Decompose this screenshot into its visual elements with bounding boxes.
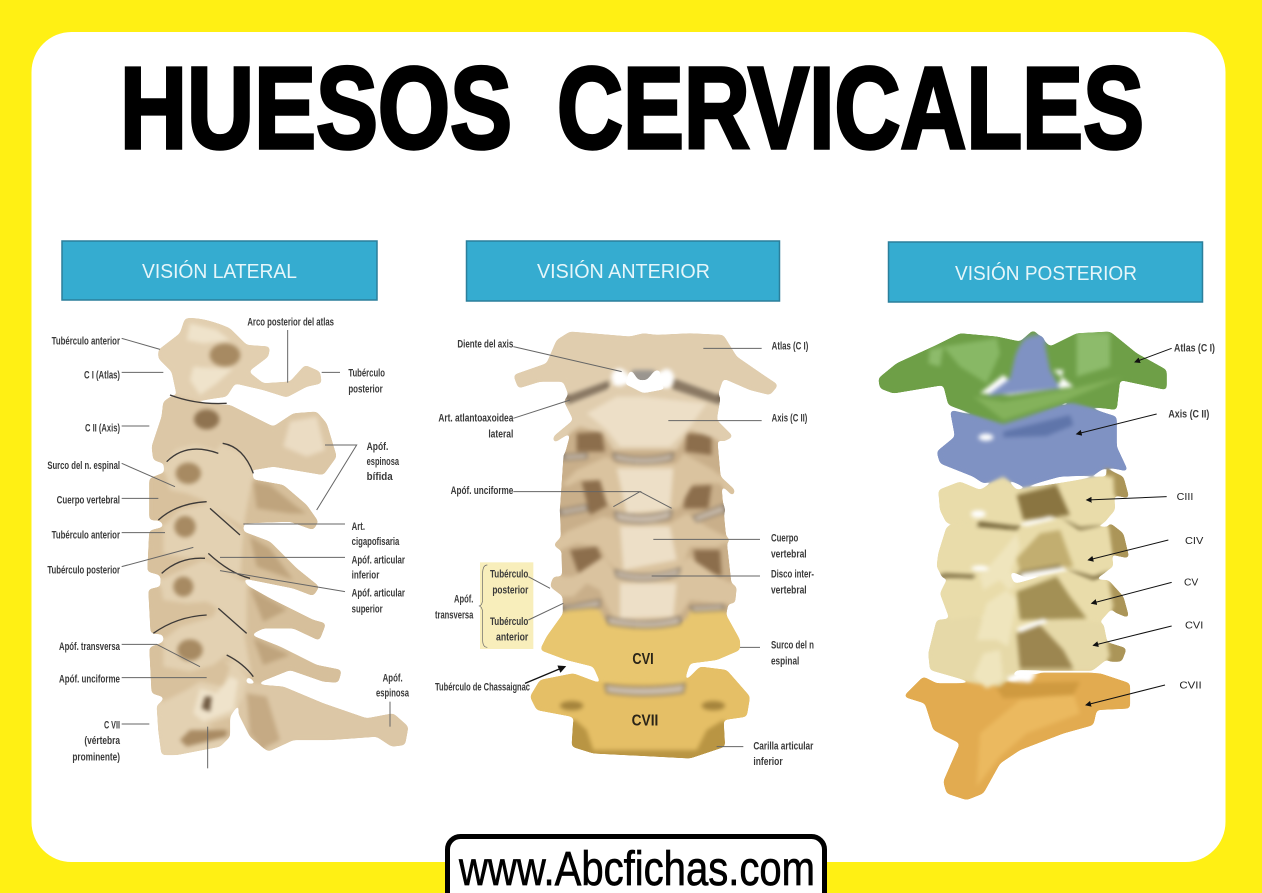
CV bbox=[940, 572, 1113, 630]
anterior view labels: Tubérculo de Chassaignac bbox=[435, 682, 530, 694]
posterior view labels: Atlas (C I) bbox=[1174, 343, 1215, 355]
posterior view labels: CVII bbox=[1179, 680, 1202, 691]
joint lines bbox=[153, 395, 253, 677]
anterior view labels: Tubérculo bbox=[490, 568, 529, 580]
anterior view labels: Apóf. unciforme bbox=[451, 485, 513, 497]
heading: visión anterior: VISIÓN ANTERIOR bbox=[537, 260, 710, 283]
right spurs bbox=[1105, 468, 1129, 662]
lateral view labels: Apóf. transversa bbox=[59, 641, 121, 653]
intervertebral discs bbox=[560, 380, 725, 695]
posterior column base bbox=[560, 423, 732, 620]
C I bbox=[158, 318, 322, 400]
heading: visión posterior: VISIÓN POSTERIOR bbox=[955, 262, 1137, 285]
foramina bbox=[611, 369, 674, 388]
lateral view labels: Apóf. unciforme bbox=[59, 674, 120, 686]
anterior view labels: Tubérculo bbox=[490, 616, 529, 628]
lateral view labels: Tubérculo anterior bbox=[52, 529, 121, 541]
anterior view labels bbox=[435, 339, 814, 768]
lateral view labels: prominente) bbox=[72, 752, 120, 764]
lateral view labels: Arco posterior del atlas bbox=[247, 317, 334, 329]
notches bbox=[971, 510, 1067, 683]
posterior view labels: CV bbox=[1184, 578, 1199, 589]
anterior view labels: vertebral bbox=[771, 584, 807, 596]
column base bbox=[147, 443, 253, 755]
anterior view labels: Art. atlantoaxoidea bbox=[438, 413, 514, 425]
CIV bbox=[937, 518, 1113, 578]
anterior view labels: Apóf. bbox=[454, 593, 473, 605]
yellow vertebrae CVI and CVII bbox=[530, 603, 750, 758]
atlas (green) bbox=[878, 330, 1167, 424]
lateral view labels: Apóf. bbox=[367, 441, 388, 453]
posterior view labels bbox=[1168, 343, 1215, 691]
anterior view labels: Carilla articular bbox=[753, 740, 814, 752]
lateral view labels: C I (Atlas) bbox=[84, 369, 120, 381]
panel: posterior view diagram bbox=[878, 330, 1215, 800]
lateral view labels: Tubérculo anterior bbox=[52, 335, 121, 347]
CVI bbox=[928, 617, 1110, 687]
anterior view labels: Disco inter- bbox=[771, 569, 814, 581]
anterior view labels: inferior bbox=[753, 756, 783, 768]
lateral view labels: posterior bbox=[348, 383, 383, 395]
leader lines bbox=[479, 347, 762, 747]
vertebra label CVI: CVI bbox=[632, 651, 654, 668]
spinous processes bbox=[973, 533, 1020, 688]
heading: visión lateral bbox=[62, 241, 377, 300]
anterior view labels: Diente del axis bbox=[457, 339, 513, 351]
anterior view labels: espinal bbox=[771, 655, 799, 667]
illustration: anterior cervical spine bbox=[513, 332, 778, 758]
heading: visión anterior bbox=[466, 241, 780, 301]
heading: visión posterior bbox=[888, 242, 1202, 302]
title bbox=[120, 43, 1144, 173]
posterior view labels: Axis (C II) bbox=[1168, 408, 1210, 420]
foramina bbox=[173, 343, 240, 712]
posterior view labels: CVI bbox=[1185, 620, 1203, 631]
leader lines bbox=[122, 330, 390, 768]
anterior view labels: vertebral bbox=[771, 548, 807, 560]
axis (blue) bbox=[937, 403, 1128, 487]
lateral view labels: Apóf. bbox=[383, 673, 403, 685]
vertebra label CVII: CVII bbox=[632, 712, 658, 729]
lateral view labels: Tubérculo posterior bbox=[47, 564, 121, 576]
lateral view labels: Apóf. articular bbox=[352, 588, 406, 600]
lateral view labels: inferior bbox=[352, 569, 380, 581]
anterior view labels: posterior bbox=[492, 584, 529, 596]
spinous processes bbox=[237, 478, 408, 752]
lateral view labels: Art. bbox=[352, 521, 365, 533]
C VII bbox=[157, 660, 247, 755]
arrow: Chassaignac tubercle bbox=[525, 667, 565, 683]
anterior view labels: lateral bbox=[488, 429, 513, 441]
lateral view labels: (vértebra bbox=[84, 735, 121, 747]
illustration: lateral cervical spine bbox=[147, 318, 408, 755]
CVII bbox=[903, 673, 1130, 800]
C II bbox=[152, 395, 337, 475]
lateral pieces bbox=[160, 443, 253, 677]
panel: anterior view diagram bbox=[435, 332, 814, 768]
lateral view labels: espinosa bbox=[376, 688, 410, 700]
lateral view labels: superior bbox=[352, 603, 383, 615]
anterior view labels: transversa bbox=[435, 609, 474, 621]
anterior view labels: Cuerpo bbox=[771, 533, 799, 545]
anterior view labels: Surco del n bbox=[771, 639, 814, 651]
lateral view labels: Tubérculo bbox=[348, 368, 385, 380]
posterior view labels: CIV bbox=[1185, 536, 1204, 547]
lateral view labels bbox=[47, 317, 410, 764]
lateral view labels: C VII bbox=[104, 719, 120, 731]
CIII bbox=[938, 477, 1115, 530]
dens bbox=[987, 335, 1060, 396]
anterior view labels: Axis (C II) bbox=[772, 413, 808, 425]
lateral view labels: Surco del n. espinal bbox=[47, 460, 120, 472]
title: HUESOS bbox=[120, 43, 512, 173]
arrows bbox=[1077, 348, 1172, 705]
lateral view labels: C II (Axis) bbox=[85, 423, 120, 435]
heading: visión lateral: VISIÓN LATERAL bbox=[142, 260, 297, 283]
posterior view labels: CIII bbox=[1177, 492, 1193, 503]
lateral view labels: cigapofisaria bbox=[352, 536, 400, 548]
panel: lateral view diagram bbox=[47, 317, 410, 768]
lateral view labels: Apóf. articular bbox=[352, 554, 406, 566]
lateral view labels: bífida bbox=[367, 471, 393, 483]
anterior view labels: anterior bbox=[496, 632, 529, 644]
illustration: posterior cervical spine bbox=[878, 330, 1167, 800]
lateral view labels: Cuerpo vertebral bbox=[57, 494, 120, 506]
anterior view labels: Atlas (C I) bbox=[772, 340, 809, 352]
tubercle highlight box bbox=[480, 562, 533, 649]
lateral view labels: espinosa bbox=[367, 456, 400, 468]
